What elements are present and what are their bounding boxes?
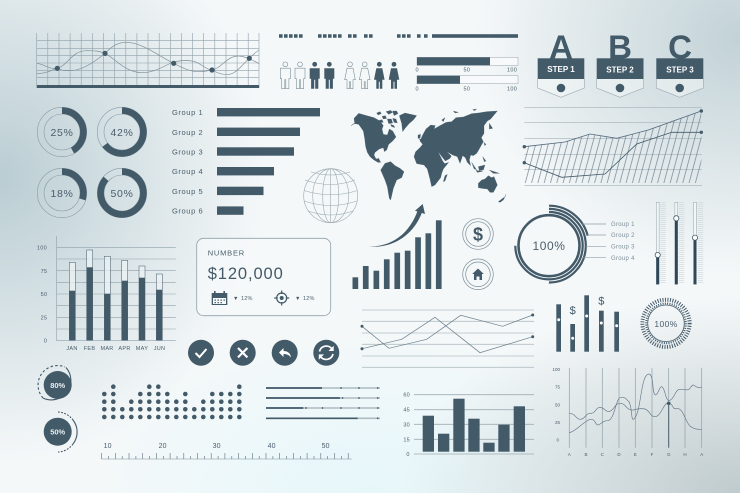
column chart <box>403 393 534 458</box>
horizontal group bars <box>172 108 320 216</box>
number card: 12% <box>303 296 315 302</box>
column chart: 15 <box>403 437 410 443</box>
icon: dollar badge: $ <box>473 224 483 244</box>
step 3 badge <box>656 28 703 97</box>
step 1 badge: STEP 1 <box>547 65 575 74</box>
spline chart with marker: 100 <box>552 367 560 372</box>
column chart: 30 <box>403 422 410 428</box>
world map <box>351 109 506 202</box>
icon: target <box>274 290 289 306</box>
radial ring chart: Group 1 <box>611 222 635 228</box>
column chart: 0 <box>406 452 410 458</box>
spline chart with marker: C <box>601 452 605 457</box>
stacked monthly bar chart: MAR <box>100 346 114 352</box>
number card: ▼ <box>295 296 300 302</box>
progress scale bars: 0 <box>416 68 419 74</box>
icon: refresh button <box>313 340 339 366</box>
steps A B C <box>538 28 703 97</box>
arrow <box>369 204 425 247</box>
stacked monthly bar chart: MAY <box>136 346 148 352</box>
spline chart with marker: A <box>568 452 571 457</box>
step 1 badge: A <box>549 28 573 65</box>
donut 42%: 42% <box>110 127 134 139</box>
stacked monthly bar chart: 50 <box>41 292 47 298</box>
progress scale bars: 100 <box>507 68 517 74</box>
step 3 badge: STEP 3 <box>666 66 694 74</box>
people pictograms <box>280 62 399 89</box>
dollar dot bars: $ <box>570 305 576 317</box>
radial ring chart: Group 4 <box>611 256 635 262</box>
icon: dollar badge <box>463 219 493 249</box>
icon: back button <box>272 340 298 366</box>
spline chart with marker: 25 <box>555 420 560 425</box>
stacked monthly bar chart: APR <box>118 346 131 352</box>
spline chart with marker: D <box>617 452 621 457</box>
top line chart <box>37 33 259 88</box>
radial ring chart <box>509 206 635 286</box>
ruler scale: 10 <box>104 443 112 450</box>
icon: check button <box>188 340 214 366</box>
donut 18%: 18% <box>50 188 74 200</box>
dollar dot bars <box>556 295 619 352</box>
gauge 50% <box>44 412 77 452</box>
progress scale bars <box>416 57 518 92</box>
icon: calendar <box>212 291 227 305</box>
gauge 80%: 80% <box>50 381 66 390</box>
donut 25%: 25% <box>50 127 74 139</box>
donut 50%: 50% <box>110 188 134 200</box>
ruler scale: 20 <box>159 443 167 450</box>
radial tick gauge: 100% <box>654 319 678 329</box>
stacked monthly bar chart: 0 <box>44 338 47 344</box>
column chart: 60 <box>403 393 410 399</box>
ruler scale: 40 <box>268 443 276 450</box>
step 2 badge: STEP 2 <box>606 66 634 74</box>
progress scale bars: 50 <box>464 86 470 92</box>
spline chart with marker: B <box>584 452 588 457</box>
stacked monthly bar chart: 100 <box>37 246 47 252</box>
horizontal group bars: Group 6 <box>172 206 203 216</box>
ruler scale: 30 <box>213 443 221 450</box>
donut 18% <box>37 168 87 218</box>
stacked monthly bar chart: JUN <box>154 346 165 352</box>
dot matrix chart <box>102 384 242 419</box>
progress scale bars: 100 <box>507 86 517 92</box>
ruler scale: 50 <box>322 443 330 450</box>
horizontal group bars: Group 4 <box>172 167 203 176</box>
spline chart with marker <box>552 367 703 457</box>
legend squares strip <box>279 34 518 38</box>
icon: close button <box>230 340 256 366</box>
spline chart with marker: 0 <box>556 438 559 442</box>
radial ring chart: Group 2 <box>611 233 635 239</box>
stacked monthly bar chart: 25 <box>41 315 47 321</box>
icon: home badge <box>463 259 493 290</box>
spline chart with marker: 50 <box>555 402 560 407</box>
step 2 badge <box>597 28 644 97</box>
progress scale bars: 0 <box>416 86 419 92</box>
stacked monthly bar chart: JAN <box>66 346 78 352</box>
gauge 50%: 50% <box>50 428 66 437</box>
horizontal group bars: Group 5 <box>172 187 203 196</box>
map: eurasia africa australia <box>414 109 506 202</box>
radial tick gauge <box>642 300 690 347</box>
wireframe globe <box>304 169 358 223</box>
number card: NUMBER <box>208 249 245 258</box>
spline chart with marker: F <box>651 452 654 457</box>
number card: ▼ <box>233 296 238 302</box>
stacked monthly bar chart: 75 <box>41 269 47 275</box>
growth bar chart with arrow <box>352 204 442 289</box>
spline chart with marker: A <box>700 452 703 457</box>
donut 25% <box>37 107 87 157</box>
dollar dot bars: $ <box>598 296 604 308</box>
multi-line chart center <box>360 310 534 367</box>
number card <box>197 238 331 316</box>
map: americas <box>351 110 417 200</box>
donut 42% <box>97 107 147 157</box>
vertical sliders <box>655 202 700 284</box>
radial ring chart: 100% <box>532 239 566 253</box>
slider progress lines <box>266 387 380 419</box>
radial ring chart: Group 3 <box>611 244 635 250</box>
stacked monthly bar chart: FEB <box>84 346 95 352</box>
horizontal group bars: Group 1 <box>172 108 203 117</box>
hatched area line chart <box>523 107 703 185</box>
progress scale bars: 50 <box>464 68 470 74</box>
step 3 badge: C <box>668 28 692 65</box>
number card: $120,000 <box>208 265 284 283</box>
spline chart with marker: G <box>667 452 671 457</box>
spline chart with marker: 75 <box>555 385 560 390</box>
number card: 12% <box>241 296 253 302</box>
spline chart with marker: H <box>683 452 687 457</box>
stacked monthly bar chart <box>37 236 176 352</box>
horizontal group bars: Group 3 <box>172 148 203 156</box>
step 1 badge <box>538 28 584 97</box>
horizontal group bars: Group 2 <box>172 128 203 137</box>
gauge 80% <box>38 366 72 400</box>
step 2 badge: B <box>608 28 632 65</box>
spline chart with marker: E <box>634 452 637 457</box>
donut 50% <box>97 168 147 218</box>
ruler scale <box>101 443 352 459</box>
column chart: 45 <box>403 408 410 414</box>
